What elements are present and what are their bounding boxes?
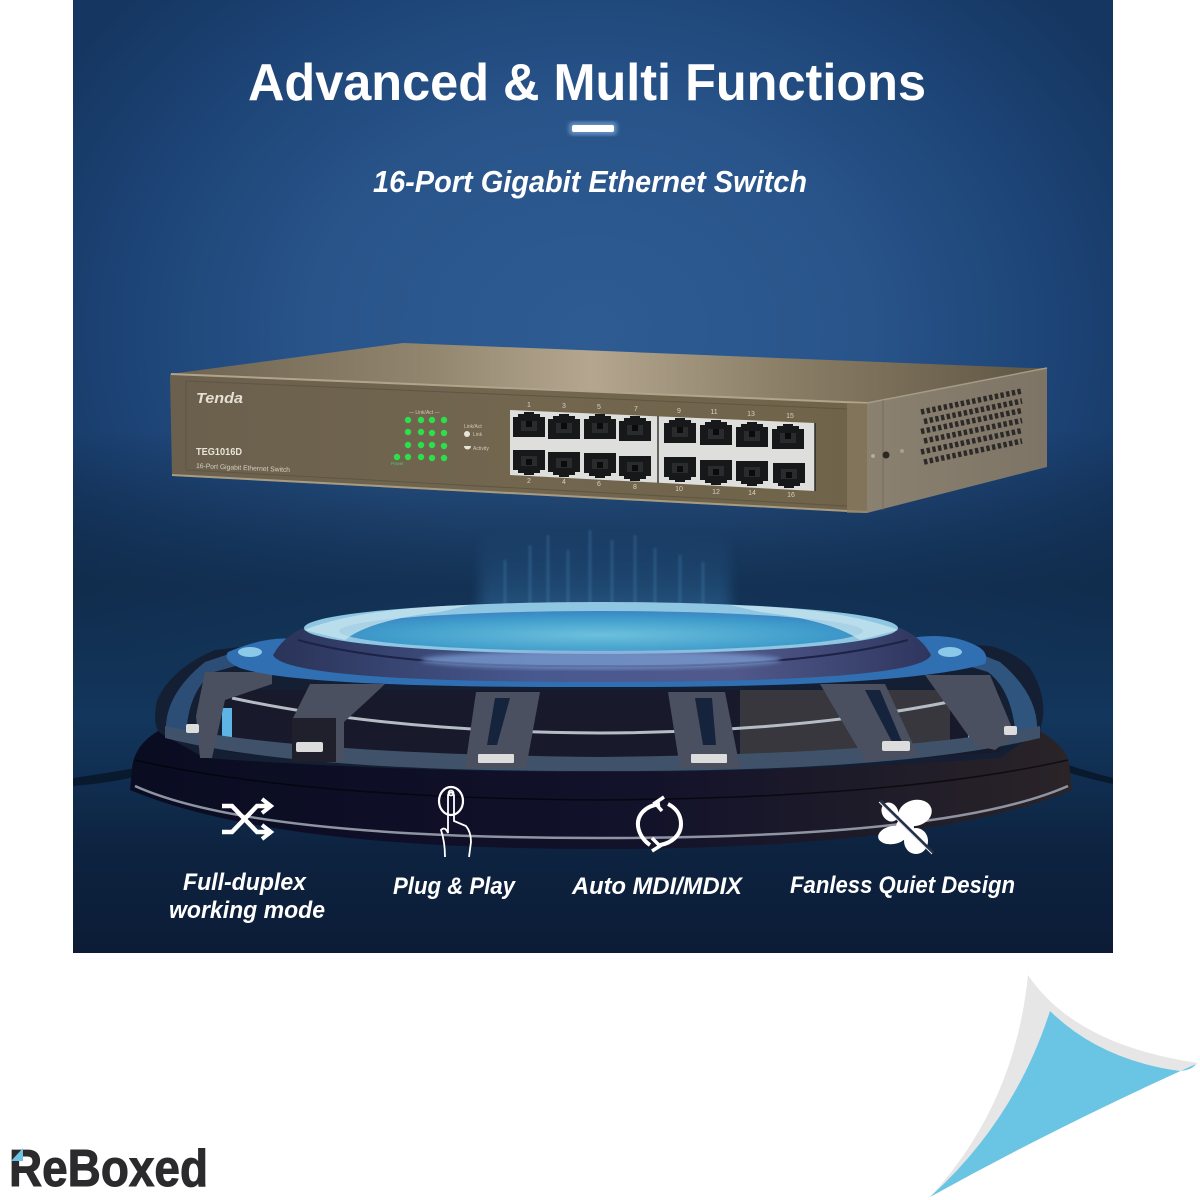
port numbers: 12 (712, 489, 720, 496)
port numbers: 14 (748, 490, 756, 497)
port numbers: 6 (597, 481, 601, 488)
divider bar (569, 122, 617, 135)
port panel (510, 410, 815, 491)
platform struts (196, 672, 1015, 768)
switch top panel (170, 343, 1047, 403)
label: full-duplex: working mode (169, 897, 325, 924)
platform outer shell (155, 640, 1043, 772)
port numbers: 8 (633, 484, 637, 491)
port numbers: 4 (562, 479, 566, 486)
subtitle: 16-Port Gigabit Ethernet Switch (373, 164, 807, 199)
platform indicator lights (186, 724, 1017, 763)
port numbers: 16 (787, 492, 795, 499)
platform rail (232, 698, 968, 733)
port numbers: 2 (527, 478, 531, 485)
icon: crossed-out fan (877, 796, 935, 854)
icon: shuffle arrows (222, 799, 271, 839)
platform middle ring (273, 622, 931, 682)
icon: finger touch (439, 787, 471, 857)
title: Advanced & Multi Functions (248, 54, 926, 112)
port numbers: 11 (710, 409, 718, 416)
ethernet ports (513, 412, 805, 488)
LED labels: Link (473, 432, 483, 438)
glowing platform (130, 602, 1072, 849)
platform glowing top disc (304, 602, 898, 669)
port numbers: 9 (677, 408, 681, 415)
switch front face (170, 374, 867, 513)
platform base (130, 722, 1072, 849)
page curl corner (930, 975, 1198, 1197)
label: full-duplex: Full-duplex (183, 869, 308, 896)
port numbers (527, 402, 795, 499)
LED labels: Activity (473, 446, 489, 452)
model name: TEG1016D (196, 447, 242, 458)
ReBoxed logo: ReBoxed (9, 1140, 208, 1198)
network switch product (170, 343, 1047, 513)
port numbers: 7 (634, 406, 638, 413)
feature: plug and play (393, 787, 517, 900)
platform lower band (165, 726, 1040, 771)
label: MDI: Auto MDI/MDIX (571, 873, 744, 900)
platform interior (225, 690, 1000, 768)
label: fanless: Fanless Quiet Design (790, 872, 1015, 899)
switch side face (867, 368, 1047, 513)
Tenda logo: Tenda (196, 390, 243, 407)
icon: cycle arrows (638, 797, 681, 851)
port numbers: 3 (562, 403, 566, 410)
LED labels: Power (391, 461, 404, 466)
feature: auto MDI/MDIX (571, 797, 744, 900)
LED labels: — Link/Act — (409, 410, 440, 416)
LED labels: Link/Act (464, 424, 482, 430)
feature: full-duplex (169, 799, 325, 924)
panel: blue product background (73, 0, 1113, 953)
port numbers: 15 (786, 413, 794, 420)
feature: fanless (790, 796, 1015, 899)
LED labels (391, 410, 489, 466)
model description: 16-Port Gigabit Ethernet Switch (196, 463, 290, 474)
LED indicators (394, 417, 447, 461)
port numbers: 5 (597, 404, 601, 411)
port numbers: 1 (527, 402, 531, 409)
platform shoulder ring (226, 636, 986, 687)
light beams above platform (480, 530, 730, 615)
port numbers: 10 (675, 486, 683, 493)
port numbers: 13 (747, 411, 755, 418)
label: full-duplex (169, 869, 325, 924)
label: plug and play: Plug & Play (393, 873, 517, 900)
